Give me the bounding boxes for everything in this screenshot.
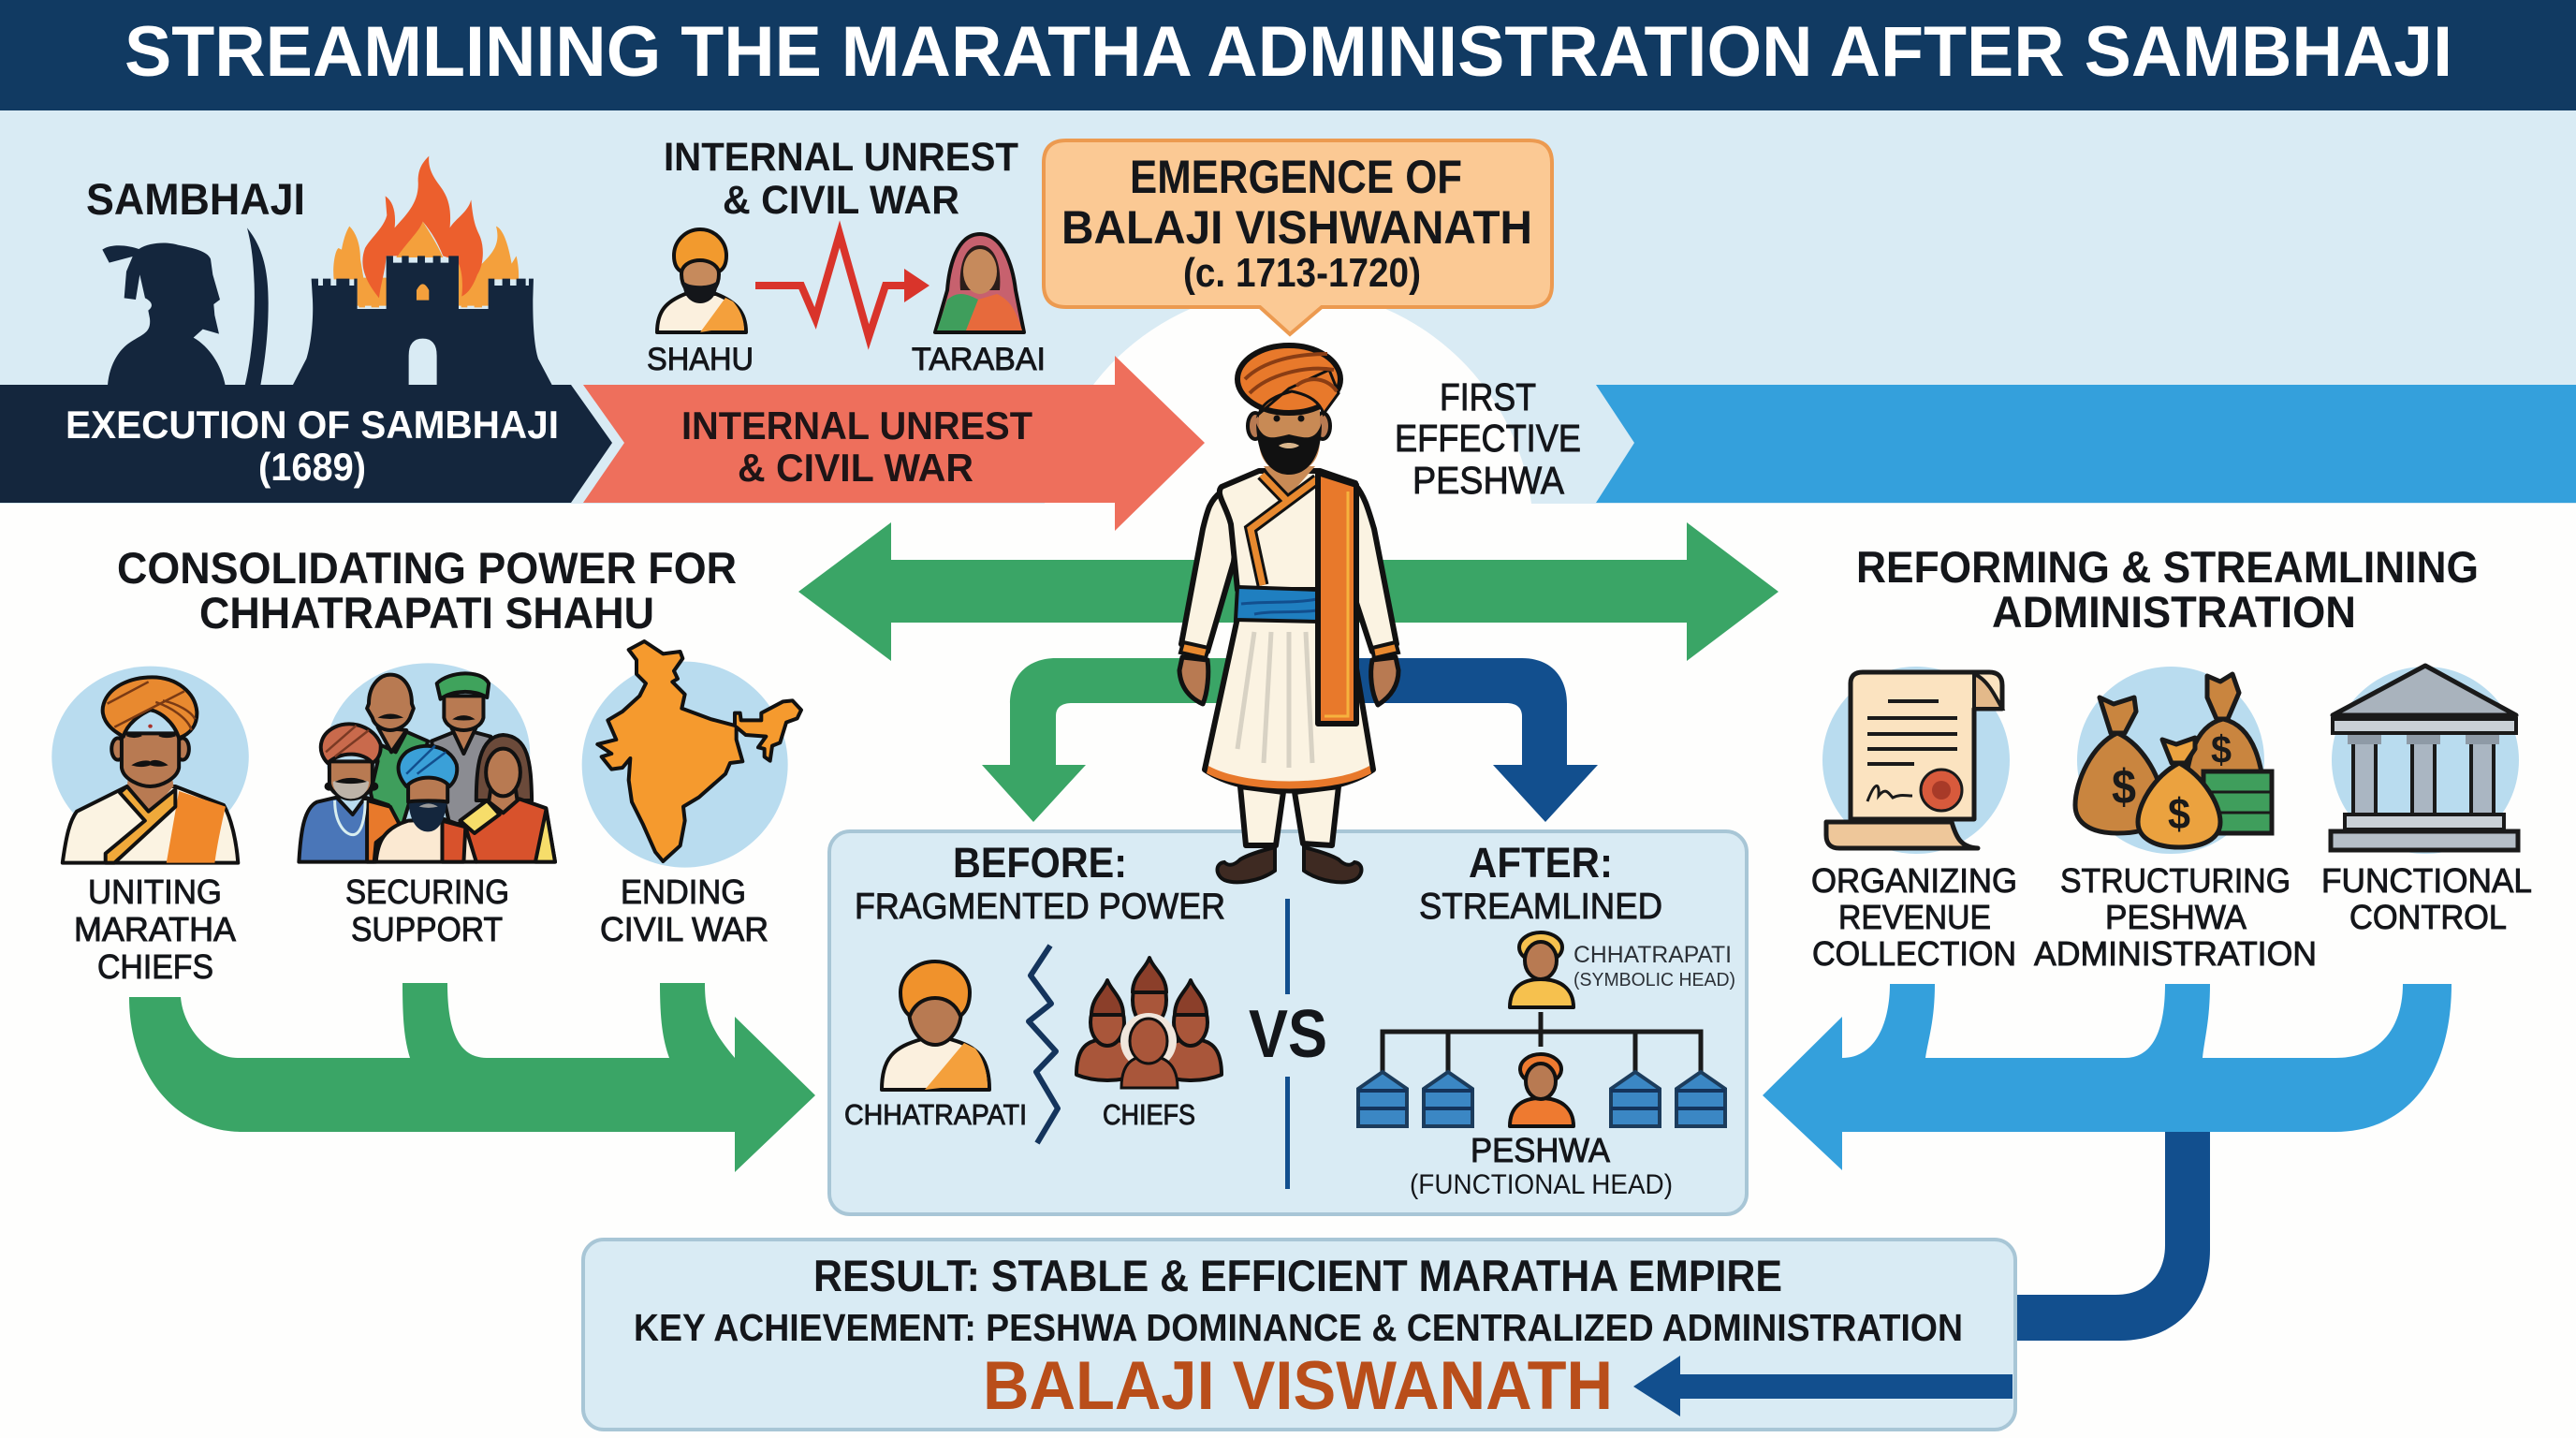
icon: functional head	[1510, 1054, 1573, 1126]
text: internal unrest arrow: & CIVIL WAR	[738, 446, 973, 490]
head	[1248, 391, 1330, 475]
label: securing support: SECURING	[345, 873, 509, 911]
icon: office 3	[1611, 1072, 1660, 1126]
chevron: execution of Sambhaji	[0, 385, 612, 503]
heading: consolidating power: CONSOLIDATING POWER FOR	[117, 543, 737, 593]
torso	[1220, 471, 1355, 590]
label: symbolic head	[1573, 942, 1735, 990]
title banner	[0, 0, 2576, 110]
text: Balaji Viswanath: BALAJI VISWANATH	[983, 1348, 1613, 1424]
divider: fragmented zigzag	[1029, 946, 1058, 1143]
text: result: RESULT: STABLE & EFFICIENT MARATHA EMPIRE	[813, 1251, 1782, 1300]
label: Peshwa functional head: PESHWA	[1471, 1131, 1610, 1169]
heading: consolidating power: CHHATRAPATI SHAHU	[199, 588, 654, 638]
label: structuring Peshwa: ADMINISTRATION	[2034, 934, 2317, 973]
label: organizing revenue	[1811, 861, 2017, 973]
band: blue chevron	[1596, 385, 2576, 503]
heading: reforming administration	[1856, 542, 2479, 637]
label: ending civil war	[600, 873, 768, 948]
divider: vs line lower	[1285, 1077, 1290, 1189]
panel: execution of Sambhaji	[0, 156, 612, 503]
label: uniting chiefs	[74, 873, 236, 986]
label: uniting chiefs: UNITING	[88, 873, 222, 911]
title banner: STREAMLINING THE MARATHA ADMINISTRATION AFTER SAMBHAJI	[124, 12, 2452, 92]
sash belt	[1236, 587, 1318, 622]
text: VS: VS	[1249, 997, 1327, 1072]
heading: internal unrest	[664, 135, 1018, 223]
text: internal unrest arrow	[681, 404, 1032, 490]
icon: money bags: $	[2168, 789, 2190, 838]
text: execution of Sambhaji: (1689)	[258, 445, 366, 489]
icon: uniting chiefs	[51, 667, 249, 863]
icon: office 2	[1424, 1072, 1472, 1126]
icon: symbolic head	[1510, 932, 1573, 1007]
label: Chhatrapati: CHHATRAPATI	[844, 1098, 1027, 1131]
text: execution of Sambhaji	[66, 403, 559, 489]
heading: Sambhaji: SAMBHAJI	[86, 174, 305, 224]
label: functional control: CONTROL	[2349, 898, 2507, 936]
panel: result	[583, 1240, 2015, 1430]
panel: internal unrest and civil war	[583, 135, 1205, 531]
robe skirt	[1205, 618, 1373, 790]
heading: after: AFTER:	[1469, 839, 1613, 887]
arrow: green down to before	[982, 658, 1245, 822]
label: functional control: FUNCTIONAL	[2321, 861, 2532, 900]
heading: internal unrest: & CIVIL WAR	[723, 178, 959, 223]
heading: before	[855, 839, 1225, 927]
divider: vs line upper	[1285, 899, 1290, 994]
icon: Chhatrapati	[882, 961, 989, 1090]
label: Peshwa functional head	[1410, 1131, 1673, 1200]
arrow: to Balaji Viswanath	[1633, 1356, 2012, 1416]
label: functional control	[2321, 861, 2532, 936]
callout: emergence of Balaji Vishwanath: (c. 1713-1720)	[1183, 250, 1421, 296]
label: ending civil war: ENDING	[621, 873, 746, 911]
text: first effective Peshwa	[1395, 375, 1581, 502]
text: first effective Peshwa: EFFECTIVE	[1395, 417, 1581, 460]
icon: conflict zigzag arrow	[755, 234, 929, 337]
turban	[1237, 345, 1340, 414]
icon: securing support group	[299, 663, 555, 862]
text: first effective Peshwa: FIRST	[1440, 375, 1536, 418]
neck and lapels	[1251, 466, 1317, 585]
sleeves	[1181, 485, 1397, 652]
text: key achievement: KEY ACHIEVEMENT: PESHWA DOMINANCE & CENTRALIZED ADMINISTRATION	[634, 1306, 1963, 1349]
icon: office 4	[1676, 1072, 1725, 1126]
icon: office 1	[1358, 1072, 1407, 1126]
heading: after: STREAMLINED	[1419, 887, 1662, 927]
label: Tarabai: TARABAI	[912, 342, 1046, 377]
panel: consolidating power	[51, 543, 815, 1172]
icon: burning fort	[293, 156, 552, 386]
icon: government building	[2331, 666, 2519, 854]
label: structuring Peshwa	[2034, 861, 2317, 973]
label: symbolic head: CHHATRAPATI	[1573, 942, 1732, 968]
label: organizing revenue: COLLECTION	[1812, 934, 2016, 973]
text: internal unrest arrow: INTERNAL UNREST	[681, 404, 1032, 448]
heading: internal unrest: INTERNAL UNREST	[664, 135, 1018, 180]
arrow: dark blue flow to result	[2015, 1123, 2210, 1341]
label: chiefs: CHIEFS	[1103, 1098, 1195, 1131]
icon: money bags	[2075, 667, 2272, 854]
shoulder sash	[1318, 473, 1356, 724]
legs and shoes	[1217, 786, 1361, 882]
arrow: green flow to before	[129, 983, 815, 1172]
text: execution of Sambhaji: EXECUTION OF SAMBHAJI	[66, 403, 559, 447]
arrow: green double-headed	[798, 522, 1778, 661]
label: uniting chiefs: CHIEFS	[97, 947, 213, 986]
heading: before: FRAGMENTED POWER	[855, 887, 1225, 927]
arrow: internal unrest	[583, 356, 1205, 531]
icon: Shahu	[657, 229, 746, 332]
icon: chiefs group	[1076, 958, 1222, 1088]
hands and cuffs	[1179, 642, 1398, 705]
label: structuring Peshwa: STRUCTURING	[2060, 861, 2291, 900]
label: symbolic head: (SYMBOLIC HEAD)	[1573, 970, 1735, 990]
callout: emergence of Balaji Vishwanath: EMERGENCE OF	[1130, 151, 1462, 203]
arrow: blue flow to after	[1763, 984, 2452, 1170]
heading: reforming administration: ADMINISTRATION	[1992, 587, 2356, 637]
icon: money bags: $	[2211, 727, 2232, 771]
heading: consolidating power	[117, 543, 737, 638]
figure: Balaji Vishwanath	[1179, 345, 1398, 882]
label: Peshwa functional head: (FUNCTIONAL HEAD)	[1410, 1169, 1673, 1200]
icon: India map	[582, 641, 801, 868]
label: organizing revenue: ORGANIZING	[1811, 861, 2017, 900]
icon: Sambhaji silhouette	[102, 243, 226, 386]
label: organizing revenue: REVENUE	[1838, 898, 1991, 936]
icon: money bags: $	[2112, 760, 2136, 814]
icon: sword	[245, 227, 269, 386]
icon: revenue scroll	[1822, 667, 2010, 854]
heading: before: BEFORE:	[953, 839, 1127, 887]
panel: reforming administration	[1763, 542, 2532, 1341]
heading: after	[1419, 839, 1662, 927]
callout: emergence of Balaji Vishwanath	[1044, 140, 1552, 334]
label: securing support	[345, 873, 509, 948]
label: structuring Peshwa: PESHWA	[2105, 898, 2247, 936]
panel: before and after comparison	[829, 831, 1747, 1214]
org chart connectors	[1383, 1012, 1701, 1072]
text: first effective Peshwa: PESHWA	[1412, 459, 1565, 502]
label: securing support: SUPPORT	[351, 910, 503, 948]
label: Shahu: SHAHU	[647, 342, 754, 377]
icon: Tarabai	[935, 234, 1024, 332]
arrow: blue down to after	[1329, 658, 1598, 822]
callout: emergence of Balaji Vishwanath: BALAJI VISHWANATH	[1061, 201, 1532, 254]
label: uniting chiefs: MARATHA	[74, 910, 236, 948]
label: ending civil war: CIVIL WAR	[600, 910, 768, 948]
heading: reforming administration: REFORMING & STREAMLINING	[1856, 542, 2479, 592]
